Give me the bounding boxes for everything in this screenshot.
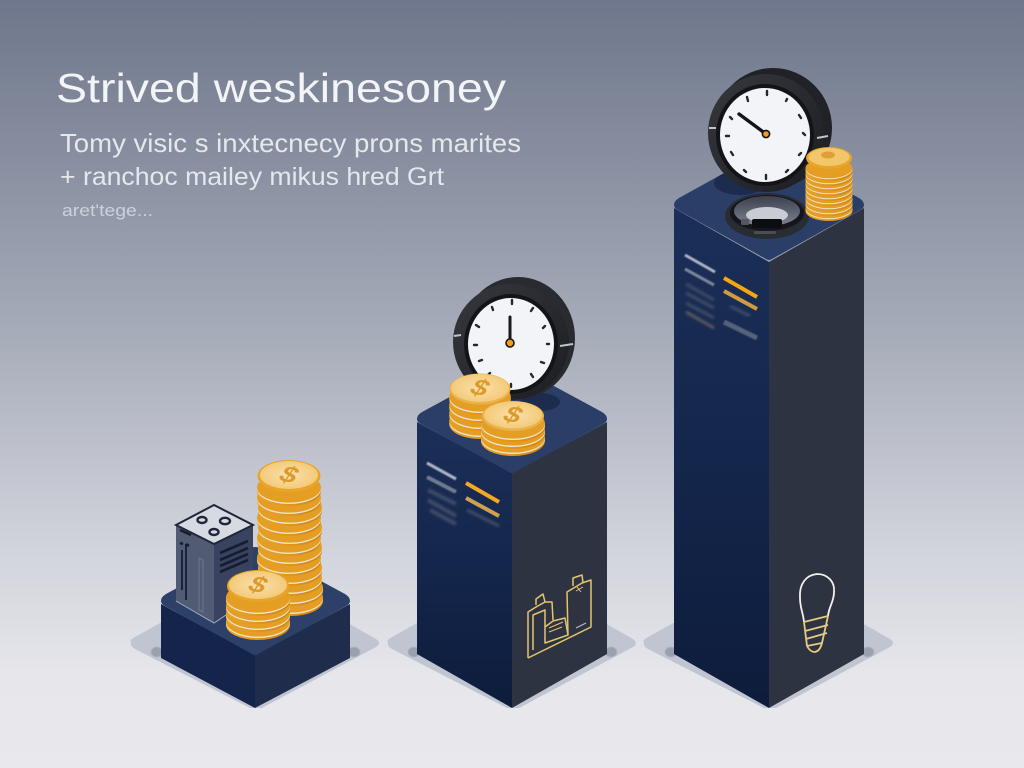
pillar 2 panel lines bbox=[427, 463, 499, 526]
pillar 2 left face bbox=[417, 422, 512, 708]
coins on pillar 2: front stack: $ bbox=[498, 400, 529, 428]
server ports bbox=[198, 517, 230, 535]
tall stack top coin bbox=[258, 460, 320, 492]
clock face bbox=[720, 88, 810, 182]
tall stack top coin: $ bbox=[274, 460, 305, 488]
clock on pillar 2 bbox=[453, 277, 575, 411]
server left face bbox=[176, 526, 214, 623]
clock ticks bbox=[474, 300, 549, 387]
pillar 1 top face bbox=[161, 547, 350, 655]
small stack top coin: $ bbox=[243, 570, 274, 598]
coins: tall stack on pillar 1 bbox=[257, 460, 323, 616]
icon: batteries bbox=[528, 575, 591, 658]
clock hand bbox=[739, 114, 766, 134]
pillar 1 left face bbox=[161, 604, 255, 708]
server top face bbox=[176, 505, 253, 544]
coins on pillar 2: back stack bbox=[449, 373, 511, 439]
clock on pillar 3 bbox=[708, 68, 832, 195]
clock hub bbox=[506, 339, 514, 347]
clock front ring bbox=[453, 284, 569, 400]
coins on pillar 2: back stack: $ bbox=[465, 373, 496, 401]
server vents bbox=[180, 530, 248, 600]
pillar 3 top face bbox=[674, 150, 864, 260]
pillar 3 left face bbox=[674, 208, 769, 708]
floor shadow: pillar 1 bbox=[130, 570, 379, 708]
clock shadow bbox=[714, 171, 766, 195]
pillar 1 right face bbox=[255, 604, 350, 708]
pillar 2 right face bbox=[512, 422, 607, 708]
pillar 3 right face bbox=[769, 208, 864, 708]
pillar 2 bbox=[417, 365, 607, 708]
clock hub bbox=[762, 130, 770, 138]
clock back ring bbox=[714, 68, 832, 188]
title: Strived weskinesoney bbox=[56, 65, 507, 111]
device puck on pillar 3 bbox=[725, 193, 809, 239]
subtitle text block: Tomy visic s inxtecnecy prons marites bbox=[60, 128, 521, 158]
icon: light bulb bbox=[800, 574, 834, 652]
subtitle text block: aret'tege... bbox=[62, 201, 153, 220]
coins on pillar 2: front stack bbox=[481, 400, 545, 456]
server right face bbox=[214, 526, 253, 623]
subtitle text block bbox=[60, 128, 521, 220]
small server device bbox=[176, 505, 253, 623]
subtitle text block: + ranchoc mailey mikus hred Grt bbox=[60, 163, 444, 191]
clock front ring bbox=[708, 74, 824, 192]
coins on pillar 3 bbox=[806, 147, 852, 221]
floor shadow: pillar 3 bbox=[644, 570, 893, 708]
clock ticks bbox=[726, 91, 805, 179]
clock shadow bbox=[520, 393, 560, 411]
clock face bbox=[468, 298, 554, 390]
coins: small stack on pillar 1 bbox=[226, 570, 290, 640]
pillar 3 panel lines bbox=[685, 255, 757, 338]
pillar 2 top face bbox=[417, 365, 607, 473]
clock hand bbox=[508, 317, 512, 343]
pillar 3 bbox=[674, 150, 864, 708]
pillar 1 bbox=[161, 547, 350, 708]
floor shadow: pillar 2 bbox=[388, 570, 636, 708]
clock back ring bbox=[461, 277, 575, 399]
